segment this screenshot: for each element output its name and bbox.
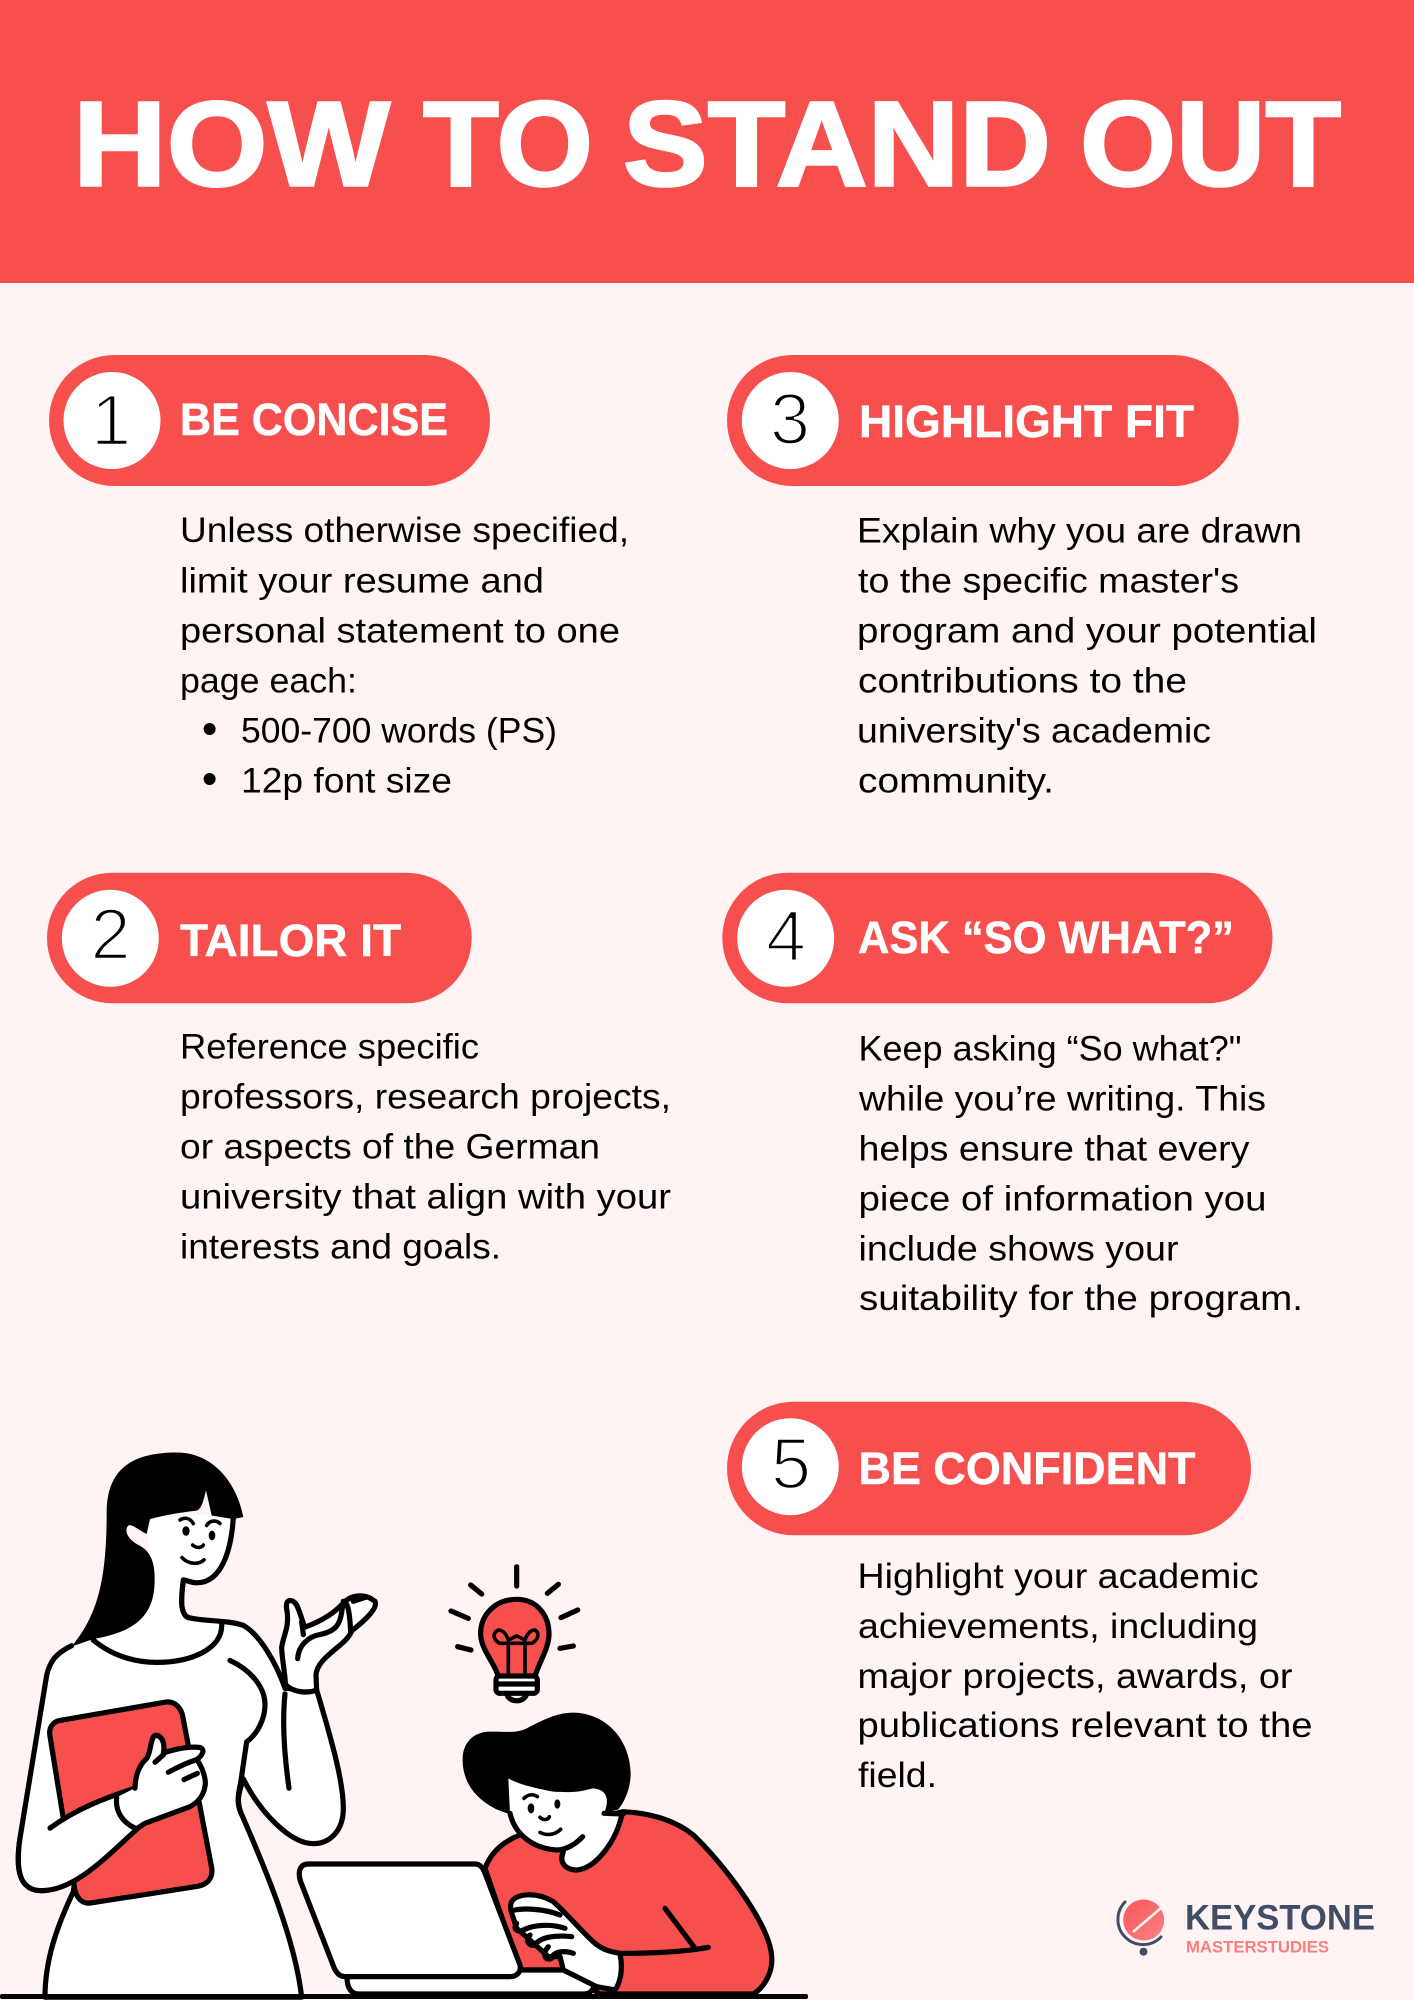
face <box>180 1518 220 1563</box>
heading pill 1: 1 <box>91 381 131 461</box>
heading pill 3 <box>727 355 1239 486</box>
hair <box>463 1713 631 1814</box>
body text 1: 12p font size <box>241 761 452 801</box>
arm holding tablet <box>21 1788 147 1889</box>
body text 1: limit your resume and <box>180 560 544 600</box>
title: STAND <box>623 76 1051 212</box>
raised hand <box>282 1596 375 1692</box>
body text 3: Explain why you are drawn <box>857 510 1302 550</box>
typing hand <box>511 1895 621 1990</box>
heading pill 2: 2 <box>90 895 131 975</box>
face <box>524 1795 561 1834</box>
body text 2: Reference specific <box>180 1026 479 1066</box>
illustration: man at laptop with lightbulb <box>299 1567 772 1994</box>
body text 4: suitability for the program. <box>859 1278 1303 1318</box>
heading pill 5: 5 <box>771 1424 811 1504</box>
body text 5: Highlight your academic <box>858 1556 1258 1596</box>
body text 5: major projects, awards, or <box>858 1656 1293 1696</box>
body text 4: helps ensure that every <box>858 1129 1250 1169</box>
heading pill 4: 4 <box>766 897 806 977</box>
heading pill 4: ASK “SO WHAT?” <box>858 912 1234 963</box>
body text 1: Unless otherwise specified, <box>180 510 629 550</box>
body text 1: page each: <box>180 661 357 701</box>
laptop <box>299 1864 595 1994</box>
hand on tablet <box>116 1735 205 1829</box>
body text 2: interests and goals. <box>180 1226 501 1266</box>
heading pill 1: BE CONCISE <box>180 394 448 445</box>
logo: keystone masterstudies: MASTERSTUDIES <box>1186 1939 1329 1957</box>
title: HOW <box>73 76 390 212</box>
body text 4: Keep asking “So what?" <box>858 1029 1242 1069</box>
body text 5 <box>858 1556 1312 1795</box>
body text 3 <box>857 510 1317 800</box>
panel: step 2 tailor it <box>47 873 671 1266</box>
panel: step 3 highlight fit <box>727 355 1317 800</box>
body text 2: university that align with your <box>180 1176 671 1216</box>
heading pill 2: TAILOR IT <box>180 915 401 966</box>
heading pill 5: BE CONFIDENT <box>858 1443 1196 1494</box>
body text 1: 500-700 words (PS) <box>241 711 557 751</box>
title: OUT <box>1080 76 1341 212</box>
heading pill 4 <box>722 873 1272 1003</box>
body text 2 <box>180 1026 671 1266</box>
header banner <box>0 0 1414 283</box>
panel: step 5 be confident <box>727 1402 1312 1795</box>
panel: step 1 be concise <box>49 355 629 801</box>
body text 3: to the specific master's <box>858 560 1239 600</box>
body text 2: or aspects of the German <box>180 1126 600 1166</box>
body text 3: contributions to the <box>858 660 1187 700</box>
illustration: woman with tablet <box>18 1453 375 1997</box>
hair <box>72 1453 243 1646</box>
title <box>73 76 1341 212</box>
tablet <box>50 1702 212 1903</box>
body text 4: include shows your <box>858 1229 1179 1269</box>
ground line <box>0 1994 808 1999</box>
body text 3: university's academic <box>857 710 1211 750</box>
panel: step 4 ask so what <box>722 873 1303 1318</box>
body text 4: piece of information you <box>858 1179 1266 1219</box>
heading pill 5 <box>727 1402 1251 1535</box>
body text 5: field. <box>858 1755 937 1795</box>
logo: keystone masterstudies: KEYSTONE <box>1185 1898 1375 1937</box>
logo: keystone masterstudies <box>1118 1898 1375 1957</box>
head <box>508 1778 622 1870</box>
heading pill 2 <box>47 873 472 1003</box>
body text 5: publications relevant to the <box>858 1705 1312 1745</box>
body text 5: achievements, including <box>858 1606 1258 1646</box>
heading pill 3: 3 <box>770 380 810 460</box>
body text 1 <box>180 510 629 801</box>
body text 2: professors, research projects, <box>180 1076 671 1116</box>
heading pill 3: HIGHLIGHT FIT <box>859 396 1194 447</box>
body text 4 <box>858 1029 1303 1318</box>
body text 3: program and your potential <box>857 610 1317 650</box>
icon: globe <box>1118 1900 1164 1956</box>
body text 3: community. <box>858 760 1054 800</box>
body text 1: personal statement to one <box>180 611 620 651</box>
body text 4: while you’re writing. This <box>858 1079 1266 1119</box>
title: TO <box>423 76 593 212</box>
heading pill 1 <box>49 355 490 486</box>
icon: lightbulb <box>451 1567 578 1701</box>
sweater <box>485 1812 772 1994</box>
